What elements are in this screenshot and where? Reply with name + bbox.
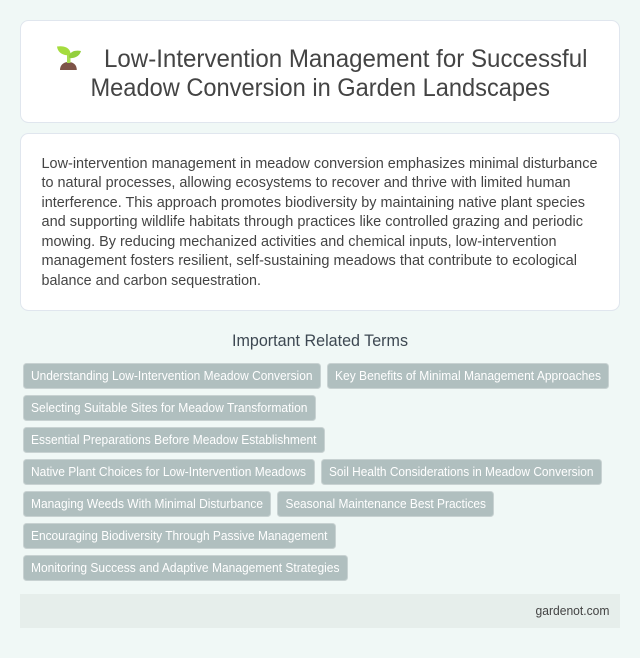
text block: description: balance and carbon sequestration.: [42, 273, 261, 289]
tag: [24, 460, 314, 484]
footer: site name: gardenot.com: [536, 604, 610, 618]
tag: Understanding Low-Intervention Meadow Conversion: [31, 369, 313, 383]
tag: [24, 364, 320, 388]
title: Meadow Conversion in Garden Landscapes: [90, 74, 550, 102]
text block: description: to natural processes, allowing ecosystems to recover and thrive with limited human: [42, 175, 570, 191]
title: Low-Intervention Management for Successful: [104, 45, 588, 73]
tag: Key Benefits of Minimal Management Approaches: [335, 369, 601, 383]
text block: description: mowing. By reducing mechanized activities and chemical inputs, low-intervention: [42, 234, 556, 250]
heading: related terms: Important Related Terms: [232, 332, 408, 350]
tag: Native Plant Choices for Low-Intervention Meadows: [31, 465, 306, 479]
tag: [24, 556, 348, 580]
icon: seedling: [57, 46, 81, 70]
text block: description: and supporting wildlife habitats through practices like controlled grazing and periodic: [42, 214, 583, 230]
panel: title card: [20, 20, 620, 122]
tag: Encouraging Biodiversity Through Passive Management: [31, 529, 328, 543]
tag: [24, 492, 270, 516]
footer: [20, 594, 620, 628]
tag: Monitoring Success and Adaptive Management Strategies: [31, 561, 340, 575]
tag: Managing Weeds With Minimal Disturbance: [31, 497, 263, 511]
panel: related term tags: [24, 364, 608, 580]
tag: [24, 428, 324, 452]
tag: [24, 396, 316, 420]
tag: Seasonal Maintenance Best Practices: [286, 497, 486, 511]
tag: Essential Preparations Before Meadow Establishment: [31, 433, 317, 447]
text block: description: management fosters resilient, self-sustaining meadows that contribute to ecological: [42, 253, 577, 269]
tag: Selecting Suitable Sites for Meadow Transformation: [31, 401, 308, 415]
tag: Soil Health Considerations in Meadow Conversion: [329, 465, 594, 479]
panel: description: [20, 134, 620, 310]
title: [90, 45, 588, 102]
text block: description: Low-intervention management in meadow conversion emphasizes minimal disturbance: [42, 156, 598, 172]
tag: [328, 364, 608, 388]
text block: description: interference. This approach promotes biodiversity by maintaining native plant species: [42, 195, 585, 211]
tag: [278, 492, 494, 516]
tag: [322, 460, 602, 484]
tag: [24, 524, 336, 548]
text block: description: [42, 156, 598, 289]
